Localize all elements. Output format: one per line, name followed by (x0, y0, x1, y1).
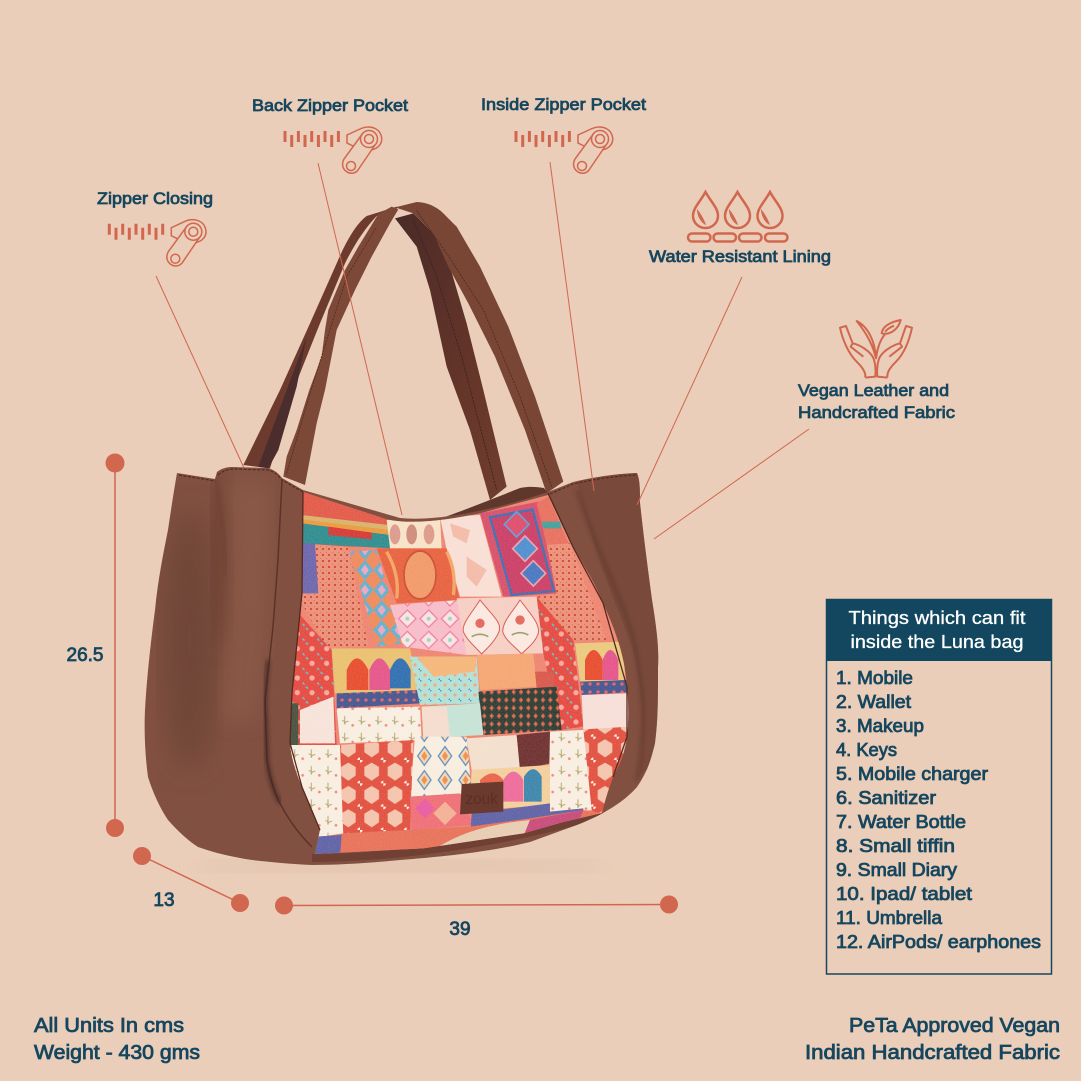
panel header (826, 599, 1052, 661)
upper right salmon (537, 543, 607, 640)
cream floral right (548, 730, 593, 813)
front left handle (283, 207, 398, 485)
list: 7. Water Bottle (836, 812, 966, 832)
back panel edge (216, 479, 226, 575)
bottom border (310, 810, 603, 857)
label: inside zipper pocket: Inside Zipper Pocket (481, 95, 646, 114)
bottom rim (312, 813, 603, 858)
back left handle (243, 207, 397, 468)
red floral right (537, 597, 583, 730)
list (836, 668, 1041, 952)
pale floral patch (440, 515, 502, 597)
panel: things which can fit (826, 599, 1052, 974)
bag interior (445, 487, 550, 517)
lower blue band (470, 803, 584, 832)
list: 12. AirPods/ earphones (836, 932, 1041, 952)
teal cream (422, 703, 483, 738)
dark green (478, 687, 562, 735)
peach (477, 653, 537, 690)
left fold (265, 480, 312, 847)
upper left salmon (300, 543, 368, 648)
footer: units and weight: All Units In cms (34, 1015, 184, 1037)
label: zipper closing: Zipper Closing (97, 189, 213, 208)
pale florals (582, 693, 630, 729)
list: 5. Mobile charger (836, 764, 988, 784)
list: 3. Makeup (836, 716, 924, 736)
red hex (340, 740, 413, 835)
list: 9. Small Diary (836, 860, 957, 880)
list: 8. Small tiffin (836, 836, 955, 856)
header text: Things which can fit (848, 608, 1026, 628)
icon: back zipper (285, 127, 382, 173)
central highlight (226, 487, 260, 704)
dimension: depth (133, 847, 249, 912)
right panel (578, 473, 658, 770)
maroon (517, 732, 550, 770)
harlequin (350, 550, 403, 647)
footer: units and weight: Weight - 430 gms (34, 1042, 200, 1064)
icon: water drops (688, 192, 788, 242)
dimension: width: 39 (449, 919, 471, 940)
leather label: zouk (465, 791, 498, 808)
icon: zipper closing (109, 220, 206, 266)
label: back zipper pocket: Back Zipper Pocket (252, 96, 408, 115)
pink diamond (410, 793, 473, 830)
dimension: height (66, 454, 124, 837)
paisley patch (387, 517, 442, 548)
leader lines (156, 162, 809, 539)
left gusset shade (162, 510, 218, 770)
bag product photo (145, 202, 665, 872)
dimension: height: 26.5 (66, 645, 104, 666)
lower arches (470, 765, 550, 808)
footer: certifications: PeTa Approved Vegan (849, 1015, 1060, 1037)
right arches (575, 642, 625, 682)
patchwork fabric panel (290, 492, 628, 854)
right stripes (537, 497, 568, 545)
list: 11. Umbrella (836, 908, 943, 928)
list: 1. Mobile (836, 668, 913, 688)
dimension: width (275, 896, 678, 940)
footer: certifications: Indian Handcrafted Fabric (805, 1042, 1060, 1064)
ogee (457, 597, 545, 655)
label: water resistant lining: Water Resistant Lining (649, 247, 831, 266)
right fold (577, 490, 643, 780)
list: 2. Wallet (836, 692, 911, 712)
list: 6. Sanitizer (836, 788, 936, 808)
handles (243, 202, 563, 500)
stripes patch (300, 490, 390, 548)
turquoise (410, 657, 480, 705)
cream floral band (337, 707, 422, 743)
ikat white (410, 737, 472, 797)
panel border (826, 600, 1052, 974)
icon: inside zipper (516, 127, 613, 173)
label: vegan leather and handcrafted fabric: Vegan Leather and (798, 381, 949, 400)
icon: hands and leaf (840, 320, 912, 378)
dimension: depth: 13 (153, 890, 175, 911)
fabric grain (287, 480, 637, 870)
right band (580, 680, 627, 695)
leather shading (162, 470, 665, 858)
label: vegan leather and handcrafted fabric: Handcrafted Fabric (798, 403, 956, 422)
blue band (337, 690, 420, 708)
list: 10. Ipad/ tablet (836, 884, 972, 904)
back right handle (395, 213, 507, 500)
fabric edge stitching (290, 492, 627, 830)
leather body (145, 467, 658, 865)
header text: inside the Luna bag (850, 632, 1024, 652)
cream left (287, 745, 343, 838)
left red floral (292, 616, 337, 745)
orange ikat (377, 548, 460, 603)
pink ikat (390, 600, 467, 655)
floor shadow (190, 860, 610, 872)
rug patch (480, 502, 558, 597)
top stitching (179, 469, 636, 494)
arches patch (332, 648, 418, 693)
cream band (467, 735, 520, 770)
leather label (460, 782, 503, 814)
list: 4. Keys (836, 740, 897, 760)
red right panel (583, 725, 630, 817)
front right handle (395, 202, 563, 493)
